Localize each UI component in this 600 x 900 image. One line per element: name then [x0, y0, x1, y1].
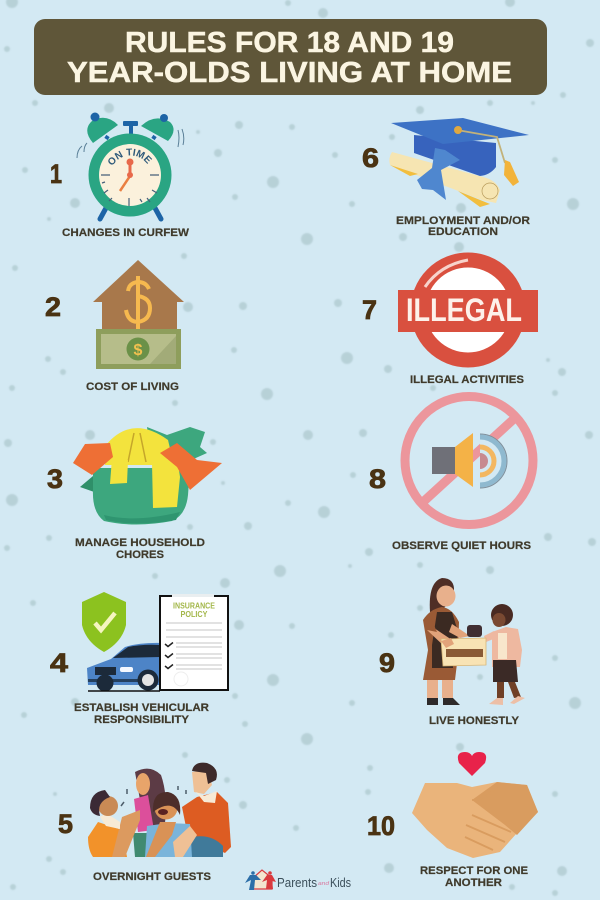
label: OBSERVE QUIET HOURS [392, 540, 531, 552]
logo: Parents and Kids: Parents [277, 875, 317, 890]
number 10: 10 [367, 811, 395, 841]
panel: rule 3 manage household chores [47, 427, 222, 561]
label: CHORES [116, 549, 164, 561]
label [396, 215, 530, 238]
number 4: 4 [50, 648, 68, 678]
logo: Parents and Kids [245, 870, 351, 890]
icon: group of friends singing [88, 763, 231, 857]
title: YEAR-OLDS LIVING AT HOME [67, 57, 512, 89]
icon: house and money: $ [134, 342, 143, 359]
number 8: 8 [369, 464, 386, 494]
icon: handshake [412, 782, 538, 858]
number 5: 5 [58, 809, 73, 839]
label: CHANGES IN CURFEW [62, 227, 190, 239]
icon: shield, car and insurance policy: INSURANCE [173, 600, 215, 610]
logo: Parents and Kids: and [318, 881, 329, 887]
panel: rule 2 cost of living [45, 260, 184, 393]
label: LIVE HONESTLY [429, 715, 520, 727]
number 2: 2 [45, 292, 61, 322]
label: MANAGE HOUSEHOLD [75, 537, 205, 549]
title: RULES FOR 18 AND 19 [125, 27, 454, 59]
icon: shield, car and insurance policy: POLICY [180, 609, 208, 619]
panel: rule 10 respect for one another [367, 752, 538, 889]
panel: rule 9 live honestly [379, 578, 525, 727]
label: ANOTHER [445, 877, 502, 889]
icon: laundry basket [73, 427, 222, 524]
title [34, 19, 547, 95]
panel: rule 7 illegal activities [362, 260, 538, 386]
logo: Parents and Kids: Kids [330, 875, 351, 890]
icon: woman and child at donation box [423, 578, 525, 705]
label: OVERNIGHT GUESTS [93, 871, 211, 883]
label [420, 865, 528, 889]
panel: rule 5 overnight guests [58, 763, 231, 883]
icon: illegal sign: ILLEGAL [406, 292, 522, 328]
icon: alarm clock: ON TIME [108, 148, 152, 165]
number 6: 6 [362, 143, 379, 173]
icon: illegal sign [398, 260, 538, 360]
icon: no sound sign [405, 396, 533, 524]
number 3: 3 [47, 464, 63, 494]
label: RESPONSIBILITY [94, 714, 190, 726]
number 1: 1 [50, 159, 62, 189]
label: ESTABLISH VEHICULAR [74, 702, 209, 714]
panel: rule 8 observe quiet hours [369, 396, 533, 552]
icon: heart [458, 752, 486, 776]
label: EDUCATION [428, 226, 498, 238]
label: EMPLOYMENT AND/OR [396, 215, 530, 227]
panel: rule 6 employment and/or education [362, 118, 530, 238]
panel: rule 4 establish vehicular responsibility [50, 592, 228, 726]
number 9: 9 [379, 648, 395, 678]
label: COST OF LIVING [86, 381, 179, 393]
label [75, 537, 205, 561]
label: RESPECT FOR ONE [420, 865, 528, 877]
number 7: 7 [362, 295, 377, 325]
icon: graduation cap and diploma [389, 118, 529, 207]
panel: rule 1 changes in curfew [50, 112, 190, 239]
icon: shield, car and insurance policy [82, 592, 228, 692]
label: ILLEGAL ACTIVITIES [410, 374, 524, 386]
label [74, 702, 209, 726]
